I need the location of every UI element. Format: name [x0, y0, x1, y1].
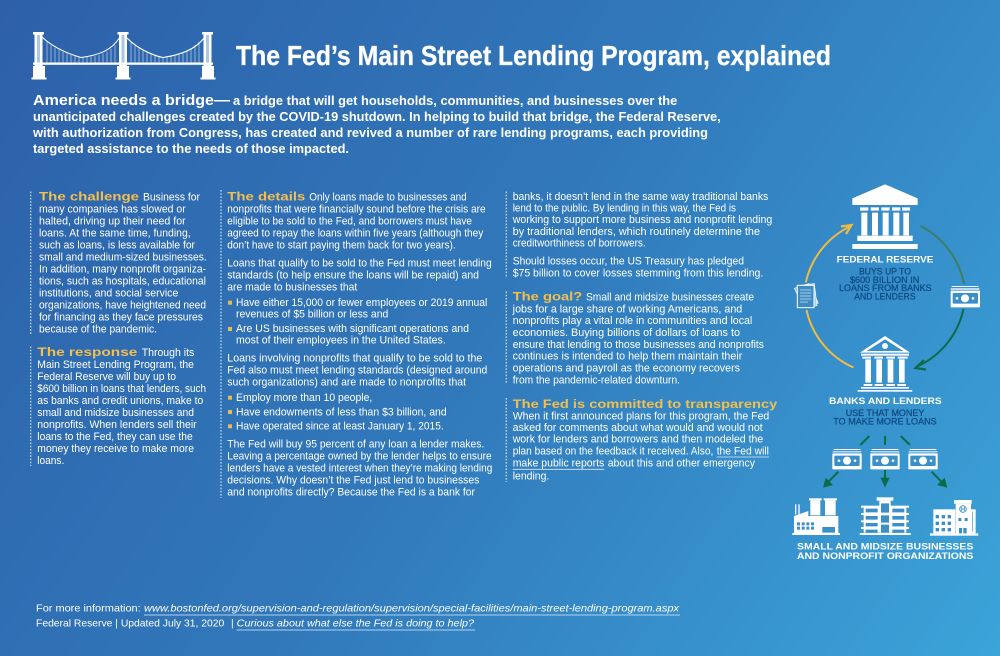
text: fed buys loans: LOANS FROM BANKS	[839, 283, 932, 293]
panel: the details: lenders have a vested interest when they’re making lending	[227, 463, 492, 475]
panel: the goal: nonprofits play a vital role in communities and local	[513, 315, 752, 327]
panel: the challenge: organizations, have heightened need	[39, 300, 206, 312]
panel: the details: agreed to repay the loans within five years (although they	[227, 228, 484, 240]
panel: the details: Loans that qualify to be sold to the Fed must meet lending	[227, 258, 492, 270]
panel: details continued: creditworthiness of borrowers.	[513, 238, 646, 250]
panel: transparency: make public reports	[513, 458, 604, 470]
panel: details continued: lend to the public. By lending in this way, the Fed is	[513, 202, 736, 214]
icon: money bill left	[832, 449, 862, 469]
panel: the challenge: Business for	[143, 192, 200, 204]
panel: the goal: ensure that lending to those businesses and nonprofits	[513, 339, 764, 351]
panel: transparency: When it first announced plans for this program, the Fed	[513, 410, 769, 422]
panel: the goal: continues is intended to help them maintain their	[513, 351, 743, 363]
text: use that money	[833, 408, 937, 426]
footer: Curious about what else the Fed is doing to help?	[237, 619, 474, 630]
panel: the response: loans to the Fed, they can use the	[37, 431, 193, 443]
panel: the response: Federal Reserve will buy up to	[37, 371, 176, 383]
arrows: banks to money	[860, 436, 910, 445]
bullet list: business criteria	[228, 297, 487, 346]
panel: the details: Loans involving nonprofits that qualify to be sold to the	[227, 353, 482, 365]
footer: For more information:	[36, 604, 141, 615]
panel: the challenge: loans. At the same time, funding,	[39, 228, 191, 240]
panel: the response: money they receive to make more	[37, 443, 194, 455]
panel: the challenge: tions, such as hospitals, educational	[39, 276, 206, 288]
panel: the details	[221, 190, 492, 498]
panel: transparency: about this and other emergency	[608, 458, 756, 470]
text: fed buys loans	[839, 266, 932, 302]
icon: banks and lenders building	[858, 336, 912, 392]
panel: the details: nonprofits that were financially sound before the crisis are	[227, 204, 486, 216]
panel: the response: Main Street Lending Program, the	[37, 359, 194, 371]
panel: details continued: by traditional lenders, which routinely determine the	[513, 226, 760, 238]
panel: the details: Leaving a percentage owned by the lender helps to ensure	[227, 451, 492, 463]
panel: the goal: jobs for a large share of working Americans, and	[512, 304, 742, 316]
icon: office building	[860, 497, 911, 535]
icon: hospital	[930, 500, 978, 536]
panel: details continued: Should losses occur, the US Treasury has pledged	[513, 256, 744, 268]
bullet list: business criteria: revenues of $5 billion or less and	[236, 308, 388, 320]
panel: transparency: plan based on the feedback it received. Also,	[513, 446, 713, 458]
panel: the details: Fed also must meet lending standards (designed around	[227, 365, 487, 377]
bullet list: business criteria: most of their employees in the United States.	[236, 334, 446, 346]
heading: the response: The response	[37, 345, 138, 359]
panel: transparency: asked for comments about what would and would not	[513, 422, 763, 434]
panel: the challenge	[31, 190, 207, 336]
footer: |	[231, 619, 234, 630]
panel: transparency: lending.	[513, 470, 549, 482]
icon: suspension bridge	[32, 32, 216, 80]
icon: federal reserve building	[852, 184, 918, 249]
bullet list: nonprofit criteria: Employ more than 10 people,	[236, 392, 372, 404]
panel: the details: standards (to help ensure the loans will be repaid) and	[227, 270, 479, 282]
panel: transparency	[506, 397, 778, 482]
arrows: money to organizations	[823, 470, 947, 488]
heading: the goal: The goal?	[513, 290, 582, 304]
panel: the response: $600 billion in loans that lenders, such	[37, 383, 206, 395]
panel: details continued: working to support more business and nonprofit lending	[512, 214, 772, 226]
panel: the details: are made to businesses that	[227, 282, 357, 294]
label: banks and lenders: BANKS AND LENDERS	[829, 396, 942, 406]
panel: transparency: work for lenders and borrowers and then modeled the	[512, 434, 763, 446]
panel: the response: small and midsize businesses and	[37, 407, 194, 419]
panel: details continued: $75 billion to cover losses stemming from this lending.	[513, 268, 763, 280]
panel: details continued	[506, 191, 772, 280]
text: fed buys loans: $600 BILLION IN	[850, 275, 919, 285]
label: small and midsize businesses: AND NONPROFIT ORGANIZATIONS	[797, 551, 973, 561]
panel: the details: eligible to be sold to the Fed, and borrowers must have	[227, 216, 472, 228]
panel: the details: Only loans made to businesses and	[309, 192, 467, 204]
panel: the response: Through its	[142, 347, 194, 359]
arrow: banks to fed, upper yellow	[806, 225, 852, 282]
icon: money bill right	[908, 449, 938, 469]
bullet list: nonprofit criteria: Have endowments of less than $3 billion, and	[236, 406, 447, 418]
arrow: banks to fed, lower yellow	[806, 310, 854, 368]
bullet list: nonprofit criteria	[228, 392, 447, 433]
text: use that money: TO MAKE MORE LOANS	[833, 416, 937, 426]
arrow: fed to banks, lower green	[916, 309, 964, 370]
title: The Fed’s Main Street Lending Program, explained	[236, 40, 831, 71]
panel: the response: nonprofits. When lenders sell their	[37, 419, 197, 431]
heading: the details: The details	[227, 190, 306, 204]
intro text block: a bridge that will get households, communities, and businesses over the	[233, 93, 677, 108]
panel: the challenge: institutions, and social service	[39, 288, 178, 300]
icon: money bill	[951, 286, 980, 307]
panel: the goal: economies. Buying billions of dollars of loans to	[513, 327, 740, 339]
icon: factory	[792, 498, 840, 535]
icon: money bill centre	[870, 449, 900, 469]
intro text block: targeted assistance to the needs of those impacted.	[33, 141, 349, 156]
panel: the challenge: because of the pandemic.	[39, 324, 157, 336]
heading: transparency: The Fed is committed to transparency	[513, 397, 778, 411]
intro text block	[32, 92, 721, 156]
panel: the challenge: halted, driving up their need for	[39, 216, 186, 228]
panel: the response: as banks and credit unions, make to	[37, 395, 203, 407]
panel: the goal: from the pandemic-related downturn.	[513, 375, 680, 387]
text: use that money: USE THAT MONEY	[846, 408, 924, 418]
footer: Federal Reserve | Updated July 31, 2020	[36, 619, 225, 630]
footer	[36, 604, 680, 630]
panel: the response	[31, 345, 206, 467]
text: fed buys loans: BUYS UP TO	[859, 266, 911, 276]
intro text block: with authorization from Congress, has created and revived a number of rare lending programs, each providing	[32, 125, 708, 140]
heading: the challenge: The challenge	[39, 190, 140, 204]
panel: the challenge: many companies has slowed or	[39, 204, 186, 216]
panel: the challenge: such as loans, is less available for	[39, 240, 195, 252]
bullet list: business criteria: Are US businesses with significant operations and	[236, 323, 469, 335]
bullet list: business criteria: Have either 15,000 or fewer employees or 2019 annual	[236, 297, 487, 309]
intro text block: unanticipated challenges created by the COVID-19 shutdown. In helping to build that bridge, the Federal Reserve,	[33, 109, 721, 124]
panel: the response: loans.	[37, 455, 64, 467]
flow diagram	[792, 184, 980, 561]
panel: the details: and nonprofits directly? Because the Fed is a bank for	[227, 486, 475, 498]
panel: the goal: Small and midsize businesses create	[586, 292, 754, 304]
panel: the goal: operations and payroll as the economy recovers	[513, 363, 740, 375]
label: small and midsize businesses	[797, 542, 973, 561]
panel: the goal	[506, 290, 764, 387]
panel: the details: don’t have to start paying them back for two years).	[227, 239, 456, 251]
icon: loan documents	[794, 284, 818, 308]
bullet list: nonprofit criteria: Have operated since at least January 1, 2015.	[236, 421, 444, 433]
label: small and midsize businesses: SMALL AND MIDSIZE BUSINESSES	[797, 542, 973, 552]
panel: the details: decisions. Why doesn’t the Fed just lend to businesses	[227, 474, 479, 486]
text: fed buys loans: AND LENDERS	[854, 292, 916, 302]
panel: the details: The Fed will buy 95 percent of any loan a lender makes.	[227, 439, 484, 451]
panel: the details: such organizations) and are made to nonprofits that	[227, 377, 466, 389]
arrow: fed to banks, upper green	[920, 226, 964, 284]
panel: transparency: the Fed will	[717, 446, 769, 458]
panel: the challenge: In addition, many nonprofit organiza-	[39, 264, 206, 276]
panel: the challenge: for financing as they face pressures	[39, 312, 203, 324]
panel: details continued: banks, it doesn’t lend in the same way traditional banks	[513, 191, 768, 203]
intro text block: America needs a bridge—	[33, 92, 230, 109]
panel: the challenge: small and medium-sized businesses.	[39, 252, 207, 264]
footer: www.bostonfed.org/supervision-and-regulation/supervision/special-facilities/main-street-lending-program.aspx	[144, 604, 680, 615]
label: federal reserve: FEDERAL RESERVE	[837, 255, 933, 265]
